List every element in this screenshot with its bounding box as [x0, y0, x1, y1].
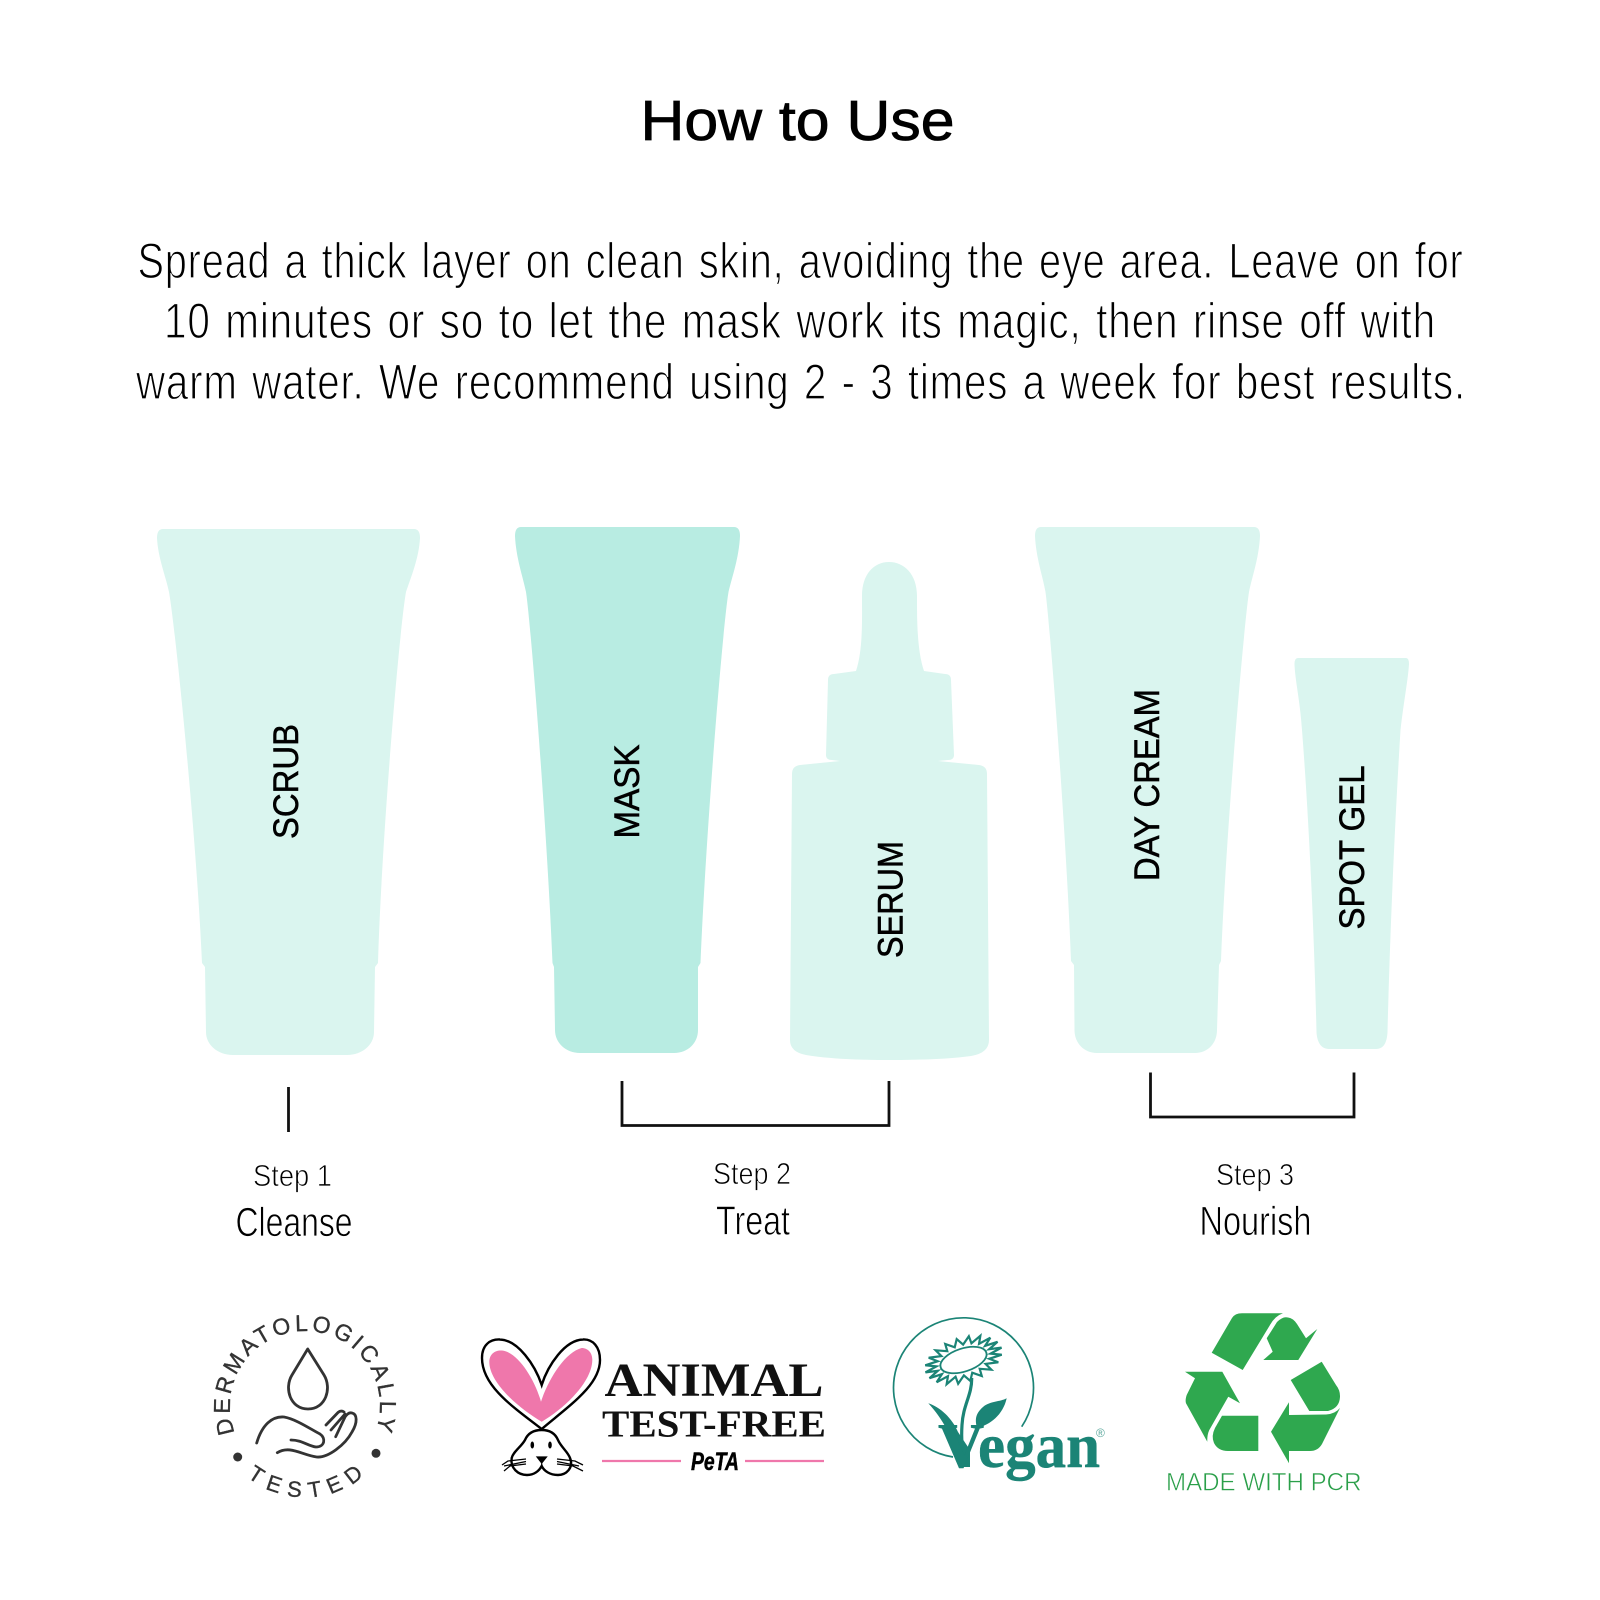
step 3 label: Nourish — [1200, 1198, 1312, 1244]
step 1 label: Cleanse — [236, 1199, 352, 1245]
product: spot gel tube: SPOT GEL — [1333, 766, 1372, 930]
step 1 label: Step 1 — [253, 1158, 332, 1193]
step 1: connector line — [287, 1087, 290, 1132]
step 2 label: Treat — [716, 1198, 790, 1244]
product: serum dropper bottle: SERUM — [872, 841, 910, 958]
step 2 label: Step 2 — [713, 1156, 791, 1191]
product: mask tube: MASK — [608, 744, 647, 838]
badge: dermatologically tested: DERMATOLOGICALLY — [214, 1315, 396, 1436]
badge: peta animal test-free — [482, 1339, 826, 1476]
icon: recycle arrows — [1185, 1313, 1340, 1463]
badge: peta animal test-free: ANIMAL — [604, 1354, 824, 1407]
step 3 label — [1200, 1157, 1312, 1244]
step 2 label — [713, 1156, 791, 1244]
icon: sunflower — [919, 1327, 1008, 1393]
badge: made with pcr recycling: MADE WITH PCR — [1166, 1468, 1362, 1496]
badge: vegan: ® — [1096, 1426, 1105, 1440]
step 1 label — [236, 1158, 352, 1245]
panel: products — [157, 527, 1409, 1060]
badge: dermatologically tested: TESTED — [251, 1464, 361, 1498]
badge: vegan — [894, 1318, 1105, 1481]
product: scrub tube: SCRUB — [267, 724, 306, 839]
badge: peta animal test-free: PeTA — [691, 1448, 739, 1476]
product: day cream tube: DAY CREAM — [1128, 689, 1167, 881]
badge: peta animal test-free: TEST-FREE — [602, 1404, 826, 1446]
step 3 label: Step 3 — [1216, 1157, 1294, 1192]
text block: instructions — [135, 233, 1466, 410]
badge: vegan: V — [938, 1410, 984, 1481]
title: How to Use — [640, 89, 954, 153]
product: serum dropper bottle — [790, 562, 989, 1060]
badge: dermatologically tested — [214, 1315, 396, 1498]
icon: water drop — [289, 1349, 327, 1409]
product: spot gel tube — [1294, 658, 1409, 1049]
icon: bunny — [482, 1339, 600, 1475]
badge: vegan: egan — [978, 1410, 1100, 1481]
product: day cream tube — [1035, 527, 1260, 1053]
badge: made with pcr recycling — [1166, 1313, 1362, 1496]
icon: hand — [257, 1411, 356, 1457]
step 2: bracket — [622, 1081, 889, 1126]
product: mask tube — [515, 527, 740, 1053]
product: scrub tube — [157, 529, 420, 1055]
step 3: bracket — [1150, 1072, 1354, 1117]
